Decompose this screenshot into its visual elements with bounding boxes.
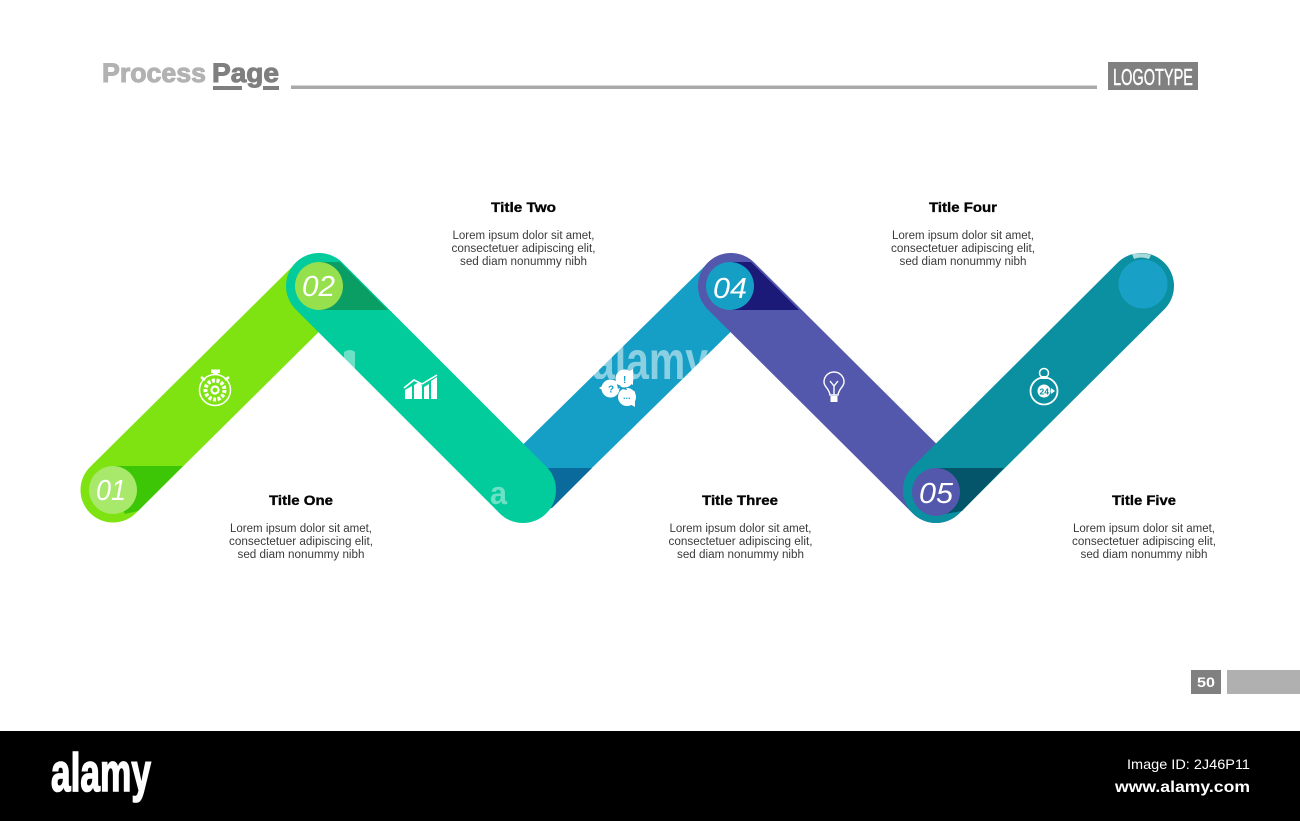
text block: title one: consectetuer adipiscing elit, xyxy=(229,536,373,548)
step 4 band: 04 xyxy=(713,273,747,305)
text block: title five: sed diam nonummy nibh xyxy=(1080,549,1208,561)
footer logo: alamy xyxy=(51,743,151,803)
text block: title one: sed diam nonummy nibh xyxy=(238,549,364,561)
step 2 band: 02 xyxy=(302,271,335,303)
title: Process Page: Process xyxy=(102,58,206,88)
step 4 band xyxy=(706,262,936,490)
logotype badge xyxy=(1108,62,1198,90)
text block: title three: Title Three xyxy=(702,492,778,508)
icon: 24 hour stopwatch xyxy=(1030,368,1058,404)
image id: Image ID: 2J46P11 xyxy=(1127,756,1250,772)
icon: bar chart xyxy=(404,375,437,399)
icon: 24 hour stopwatch: 24 xyxy=(1040,386,1049,396)
text block: title three: Lorem ipsum dolor sit amet, xyxy=(670,523,812,535)
text block: title two: Lorem ipsum dolor sit amet, xyxy=(452,230,594,242)
text block: title four: sed diam nonummy nibh xyxy=(900,256,1026,268)
icon: stopwatch gear xyxy=(200,370,230,406)
step 5 band: 05 xyxy=(919,478,954,510)
step 1 band xyxy=(89,286,319,514)
page number xyxy=(1191,670,1300,694)
page number: 50 xyxy=(1197,674,1215,690)
text block: title three: sed diam nonummy nibh xyxy=(677,549,804,561)
footer bar xyxy=(0,731,1300,821)
watermark on band: alamy xyxy=(592,331,708,391)
title: Process Page: Page xyxy=(212,58,279,88)
header xyxy=(102,58,1198,90)
text block: title two: consectetuer adipiscing elit, xyxy=(452,243,596,255)
text block: title five xyxy=(1072,492,1216,561)
text block: title one xyxy=(229,492,373,561)
icon: light bulb xyxy=(824,372,844,402)
text block: title three: consectetuer adipiscing elit, xyxy=(668,536,812,548)
title: Process Page xyxy=(102,58,279,90)
text block: title one: Title One xyxy=(269,492,333,508)
website: www.alamy.com xyxy=(1114,779,1250,796)
text block: title four: Lorem ipsum dolor sit amet, xyxy=(892,230,1034,242)
icon: speech bubbles xyxy=(599,369,636,407)
watermark fragments xyxy=(344,350,507,511)
text block: title two xyxy=(452,199,596,268)
text block: title one: Lorem ipsum dolor sit amet, xyxy=(230,523,372,535)
logotype badge: LOGOTYPE xyxy=(1113,64,1193,90)
step 5 band xyxy=(912,253,1168,516)
text block: title three xyxy=(668,492,812,561)
step 3 band xyxy=(523,286,731,508)
text block: title four xyxy=(891,199,1035,268)
text block: title four: consectetuer adipiscing elit, xyxy=(891,243,1035,255)
text block: title two: sed diam nonummy nibh xyxy=(460,256,587,268)
step 1 band: 01 xyxy=(96,475,126,507)
text block: title five: Title Five xyxy=(1112,492,1176,508)
icon: speech bubbles: ... xyxy=(623,391,631,401)
icon: speech bubbles: ? xyxy=(608,384,614,396)
step 2 band xyxy=(295,262,523,511)
text block: title two: Title Two xyxy=(491,199,556,215)
text block: title four: Title Four xyxy=(929,199,998,215)
watermark fragments: a xyxy=(490,475,507,511)
text block: title five: consectetuer adipiscing elit, xyxy=(1072,536,1216,548)
text block: title five: Lorem ipsum dolor sit amet, xyxy=(1073,523,1215,535)
icon: speech bubbles: ! xyxy=(623,375,626,386)
